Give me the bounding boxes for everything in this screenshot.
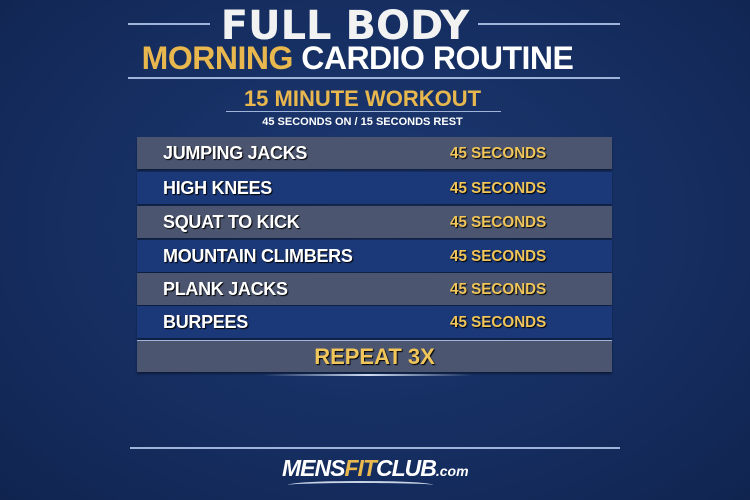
title: morning cardio routine: MORNING CARDIO ROUTINE — [142, 40, 573, 76]
row: mountain climbers — [137, 240, 612, 272]
row: plank jacks — [137, 273, 612, 305]
row: high knees: HIGH KNEES — [163, 178, 272, 198]
title: full body: FULL BODY — [221, 3, 469, 49]
row: squat to kick: SQUAT TO KICK — [163, 212, 299, 232]
subtitle: 15 minute workout: 15 MINUTE WORKOUT — [244, 86, 481, 111]
row: plank jacks: 45 SECONDS — [450, 281, 546, 298]
row: burpees — [137, 306, 612, 338]
row: plank jacks: PLANK JACKS — [163, 279, 288, 299]
row: burpees: 45 SECONDS — [450, 314, 546, 331]
row: repeat 3x: REPEAT 3X — [314, 344, 435, 369]
row: mountain climbers: 45 SECONDS — [450, 248, 546, 265]
subtitle: interval: 45 SECONDS ON / 15 SECONDS REST — [262, 116, 463, 128]
row: squat to kick — [137, 206, 612, 238]
row: mountain climbers: MOUNTAIN CLIMBERS — [163, 246, 353, 266]
row: repeat 3x — [137, 340, 612, 372]
row: jumping jacks: 45 SECONDS — [450, 145, 546, 162]
row: high knees — [137, 172, 612, 204]
logo: mensfitclub.com: MENSFITCLUB.com — [282, 455, 469, 481]
row: jumping jacks: JUMPING JACKS — [163, 143, 307, 163]
row: squat to kick: 45 SECONDS — [450, 214, 546, 231]
row: burpees: BURPEES — [163, 312, 248, 332]
row: jumping jacks — [137, 137, 612, 169]
row: high knees: 45 SECONDS — [450, 180, 546, 197]
exercise table — [136, 137, 613, 375]
